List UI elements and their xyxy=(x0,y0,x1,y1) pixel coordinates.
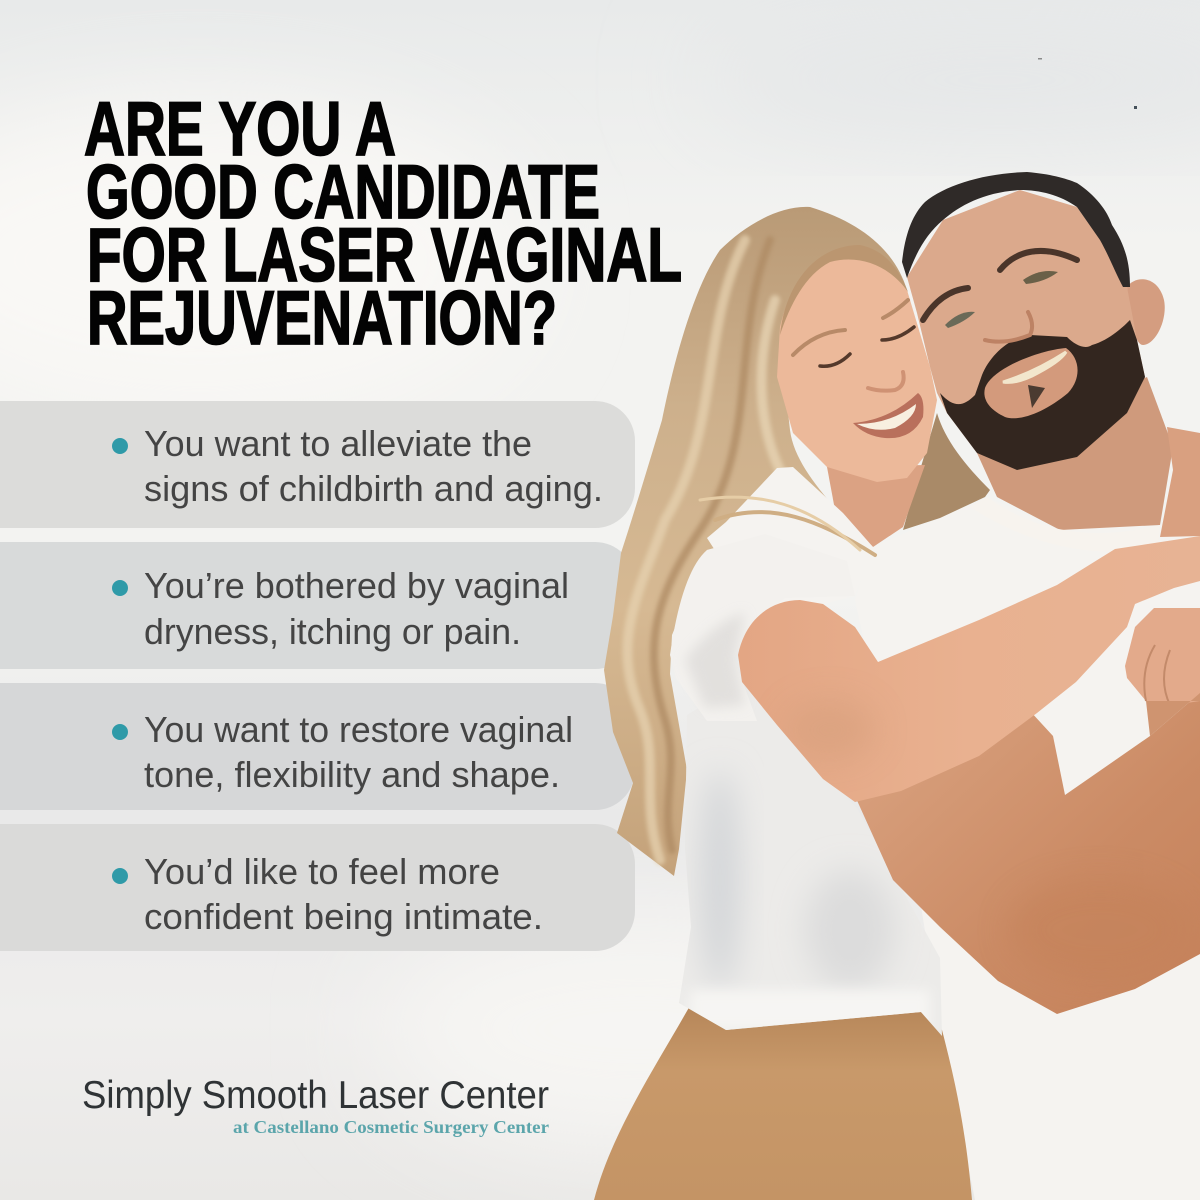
woman's pants xyxy=(594,1002,972,1200)
logo: Simply Smooth Laser Center xyxy=(82,1074,549,1117)
man's face xyxy=(907,190,1145,470)
man's nose xyxy=(985,312,1032,342)
hair strands xyxy=(627,240,800,860)
woman's arm around man's neck xyxy=(738,536,1200,802)
woman's neck xyxy=(827,465,925,547)
woman's nose xyxy=(868,372,904,391)
panel: bullet pill 4 xyxy=(0,824,635,951)
title: GOOD CANDIDATE xyxy=(86,150,600,235)
woman's puffed sleeve xyxy=(670,534,855,721)
woman's lips xyxy=(853,393,923,438)
woman's face xyxy=(777,250,937,482)
title: ARE YOU A xyxy=(84,87,396,172)
title xyxy=(84,87,682,361)
man's hair xyxy=(902,172,1130,287)
panel: bullet pill 1 xyxy=(0,401,635,528)
blouse wrinkles shading xyxy=(690,770,930,1030)
hands clasped at right xyxy=(1125,608,1200,705)
bullet item 4: You’d like to feel more xyxy=(144,851,500,892)
logo xyxy=(82,1074,549,1137)
man's t-shirt collar xyxy=(970,497,1160,552)
man's arm shading xyxy=(1010,880,1190,980)
hair behind neck xyxy=(903,413,990,530)
man's torso in white t-shirt xyxy=(855,497,1200,1200)
bullet item 4 xyxy=(112,851,543,937)
logo: at Castellano Cosmetic Surgery Center xyxy=(233,1117,549,1137)
bullet item 2: You’re bothered by vaginal xyxy=(144,565,569,606)
bullet item 2: dryness, itching or pain. xyxy=(144,611,521,652)
woman's hair over forehead xyxy=(780,245,908,335)
panel: bullet pill 3 xyxy=(0,683,635,810)
man's teeth xyxy=(1003,352,1066,382)
bullet item 3: tone, flexibility and shape. xyxy=(144,754,560,795)
title: REJUVENATION? xyxy=(87,276,557,361)
man's eyes and brows xyxy=(923,251,1077,328)
man's beard xyxy=(940,320,1145,470)
bullet item 3 xyxy=(112,709,573,795)
photo: couple embracing xyxy=(594,172,1200,1200)
woman's arm shading xyxy=(788,712,857,752)
woman's long blond hair xyxy=(604,207,907,876)
blond strands over collar xyxy=(700,497,875,555)
man's soul patch xyxy=(1028,385,1045,408)
man's ear xyxy=(1127,279,1165,345)
bullet item 1: You want to alleviate the xyxy=(144,423,532,464)
man's wrist below hand xyxy=(1146,693,1200,736)
woman's arm over man's shoulder xyxy=(1160,427,1200,537)
finger creases xyxy=(1144,645,1170,705)
blouse collar and shoulder xyxy=(707,467,873,620)
panel: bullet pill 2 xyxy=(0,542,635,669)
bullet item 4: confident being intimate. xyxy=(144,896,543,937)
bullet item 1 xyxy=(112,423,603,509)
title: FOR LASER VAGINAL xyxy=(87,213,682,298)
bullet item 2 xyxy=(112,565,569,652)
sleeve shading xyxy=(685,612,745,708)
man's arm across woman's back xyxy=(855,693,1200,1014)
man's chin and mouth skin xyxy=(984,348,1078,418)
woman's brows and closed eyes xyxy=(793,300,914,366)
bullet item 1: signs of childbirth and aging. xyxy=(144,468,603,509)
bullet item 3: You want to restore vaginal xyxy=(144,709,573,750)
woman's teeth xyxy=(857,404,916,430)
woman's blouse body xyxy=(679,680,942,1036)
man's neck xyxy=(977,377,1173,530)
